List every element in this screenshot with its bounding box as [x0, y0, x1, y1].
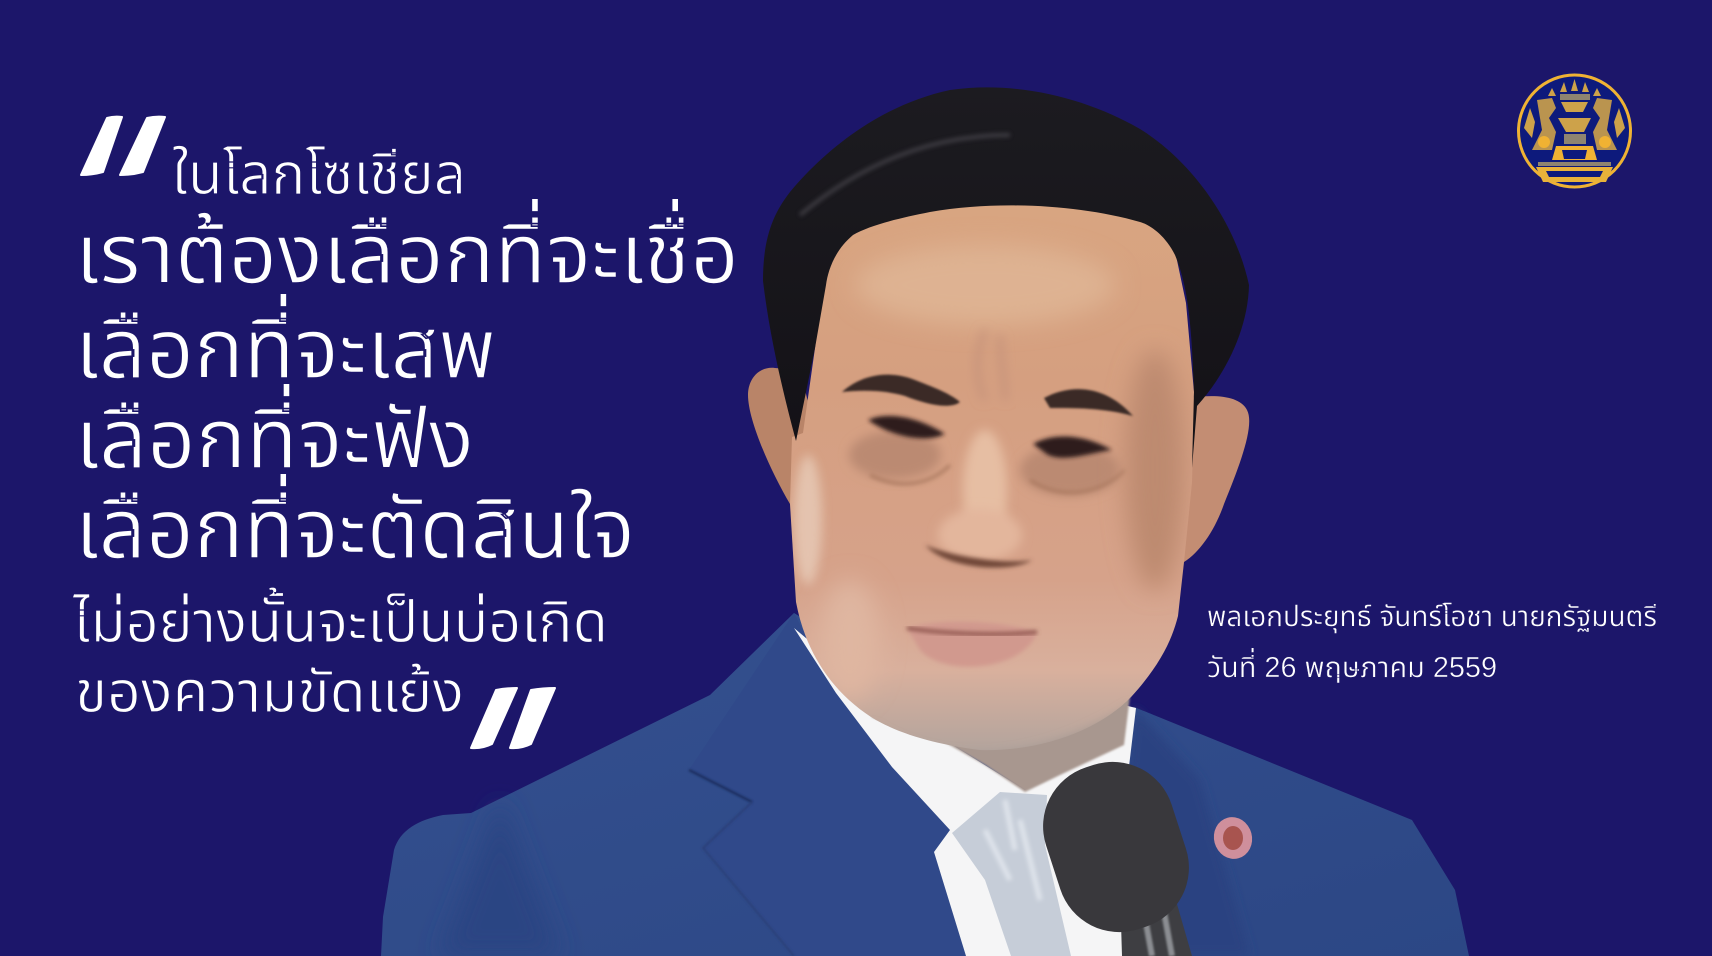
attribution	[1207, 601, 1657, 684]
icon: government emblem	[1516, 73, 1632, 189]
opening quotation mark	[81, 117, 165, 175]
quote text: ในโลกโซเชียล	[172, 142, 466, 207]
portrait photo of the prime minister	[381, 87, 1469, 956]
white shirt collar	[794, 628, 1136, 956]
quote text: เลือกที่จะตัดสินใจ	[75, 473, 635, 576]
neck shadow	[871, 680, 1130, 792]
quote text: ของความขัดแย้ง	[75, 660, 464, 725]
quote text	[72, 142, 739, 725]
quote text: เราต้องเลือกที่จะเชื่อ	[75, 198, 739, 301]
attribution: วันที่ 26 พฤษภาคม 2559	[1207, 647, 1497, 684]
microphone	[1027, 746, 1205, 956]
lapel pin	[1209, 813, 1257, 863]
eyes	[868, 416, 945, 438]
quote text: เลือกที่จะฟัง	[75, 383, 474, 486]
nose	[925, 545, 1032, 568]
tie	[952, 792, 1071, 956]
mouth	[907, 622, 1037, 667]
hair highlights	[800, 135, 1010, 215]
hair	[763, 87, 1249, 468]
quote text: เลือกที่จะเสพ	[75, 293, 496, 396]
attribution: พลเอกประยุทธ์ จันทร์โอชา นายกรัฐมนตรี	[1207, 601, 1657, 633]
face	[790, 180, 1194, 770]
suit jacket	[381, 613, 1469, 956]
eyebrows	[842, 375, 960, 406]
closing quotation mark	[471, 688, 555, 748]
quote text: ไม่อย่างนั้นจะเป็นบ่อเกิด	[72, 586, 608, 655]
right ear	[1170, 396, 1249, 562]
left ear	[748, 368, 815, 504]
